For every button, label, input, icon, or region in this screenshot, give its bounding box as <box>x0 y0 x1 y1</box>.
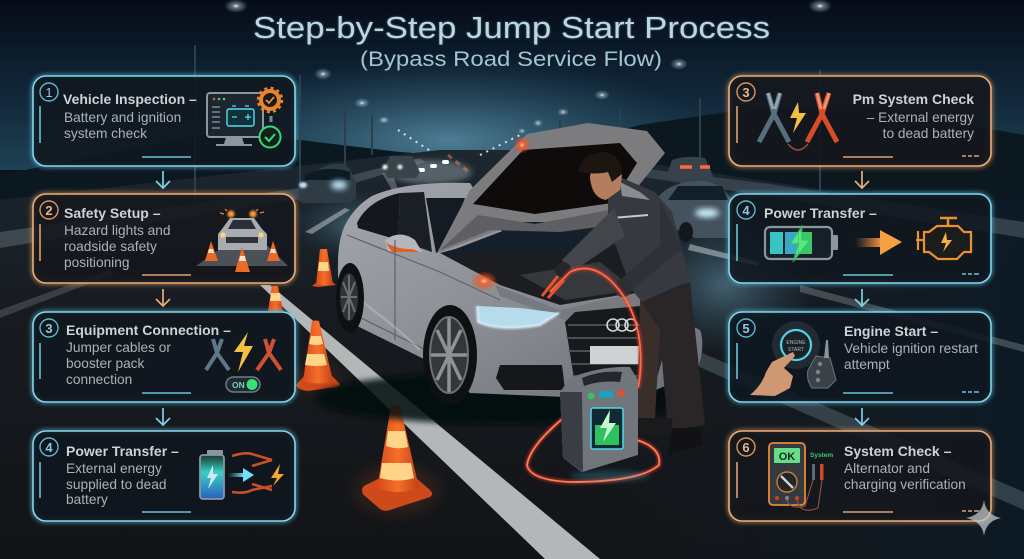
panel 4: Power Transfer: battery <box>66 492 108 507</box>
cone: small behind panel <box>268 286 283 311</box>
cone: large <box>355 405 439 514</box>
headlight <box>477 306 559 328</box>
icon: car with hazard lights and cones <box>196 209 288 272</box>
icon: start button, hand and key fob: START <box>788 347 804 353</box>
shadow <box>315 372 695 424</box>
panel 2: Safety Setup: 2 <box>45 203 53 218</box>
panel 1: Vehicle Inspection: system check <box>64 126 147 141</box>
grille <box>565 306 642 390</box>
panel 4: Power Transfer <box>33 431 295 521</box>
arrow: step 1 to 2 <box>156 171 170 188</box>
cone: small far <box>312 249 336 287</box>
rear wheel <box>336 263 364 333</box>
panel 2: Safety Setup: roadside safety <box>64 239 157 254</box>
panel 6: right Power Transfer: Power Transfer – <box>764 205 877 221</box>
panel 4: Power Transfer: supplied to dead <box>66 477 166 492</box>
panel 3: Equipment Connection: connection <box>66 372 132 387</box>
title <box>253 10 770 71</box>
panel 5: right Pm System Check: to dead battery <box>883 126 974 141</box>
panel 4: Power Transfer: 4 <box>45 440 53 455</box>
icon: clamps bolt and on switch <box>206 332 281 392</box>
arrow: right step 4 to 5 <box>855 289 869 306</box>
panel 1: Vehicle Inspection <box>33 76 295 166</box>
icon: battery to engine <box>765 218 971 262</box>
icon: start button, hand and key fob <box>750 321 836 396</box>
arrow: right step 5 to 6 <box>855 408 869 425</box>
icon: multimeter: OK <box>779 451 795 463</box>
panel 7: Engine Start: Engine Start – <box>844 323 938 339</box>
title: Step-by-Step Jump Start Process <box>253 10 770 45</box>
panel 2: Safety Setup: Safety Setup – <box>64 205 161 221</box>
icon: start button, hand and key fob: ENGINE <box>786 340 806 346</box>
panel 5: right Pm System Check: Pm System Check <box>853 91 974 107</box>
open hood <box>437 123 665 253</box>
arms <box>562 208 625 272</box>
arrow: step 3 to 4 <box>156 408 170 425</box>
car body <box>338 183 702 397</box>
icon: monitor battery gear check <box>207 88 282 148</box>
panel 7: Engine Start <box>729 312 991 402</box>
booster pack <box>560 367 650 481</box>
panel 1: Vehicle Inspection: Battery and ignition <box>64 110 181 125</box>
air intake <box>496 365 565 390</box>
panel 8: System Check <box>729 431 991 521</box>
side windows <box>357 193 400 240</box>
cone: medium <box>291 320 343 392</box>
sedan with open hood <box>315 123 702 424</box>
icon: clamps bolt and on switch: ON <box>232 380 245 390</box>
panel 3: Equipment Connection: 3 <box>45 321 53 336</box>
torso <box>608 178 690 302</box>
licence plate <box>590 346 640 364</box>
jumper cable <box>527 268 659 482</box>
distant cars <box>298 156 732 242</box>
gloves <box>555 262 571 278</box>
panel 7: Engine Start: 5 <box>742 321 750 336</box>
panel 5: right Pm System Check: 3 <box>742 85 750 100</box>
panel 6: right Power Transfer <box>729 194 991 283</box>
panel 3: Equipment Connection: Jumper cables or <box>66 340 171 355</box>
panel 2: Safety Setup: Hazard lights and <box>64 223 171 238</box>
panel 6: right Power Transfer: 4 <box>742 203 750 218</box>
front wheel <box>423 305 477 405</box>
boots <box>637 418 673 436</box>
hair <box>578 152 622 182</box>
panel 1: Vehicle Inspection: 1 <box>45 85 53 100</box>
icon: battery charge with clamps <box>200 450 284 499</box>
icon: multimeter: System <box>810 452 833 459</box>
panel 8: System Check: Alternator and <box>844 461 930 476</box>
panel 4: Power Transfer: External energy <box>66 461 162 476</box>
panel 2: Safety Setup <box>33 194 295 283</box>
door lines <box>345 235 500 352</box>
panel 2: Safety Setup: positioning <box>64 255 129 270</box>
neck and face <box>590 160 622 200</box>
panel 8: System Check: charging verification <box>844 477 966 492</box>
panel 3: Equipment Connection <box>33 312 295 402</box>
panel 4: Power Transfer: Power Transfer – <box>66 443 179 459</box>
icon: sparkle watermark <box>966 500 1001 536</box>
panel 7: Engine Start: attempt <box>844 357 890 372</box>
legs <box>640 282 705 430</box>
technician <box>555 152 705 455</box>
panel 5: right Pm System Check <box>729 76 991 166</box>
panel 8: System Check: System Check – <box>844 443 952 459</box>
traffic cones <box>268 249 439 514</box>
mirror <box>385 234 422 252</box>
panel 3: Equipment Connection: booster pack <box>66 356 145 371</box>
panel 5: right Pm System Check: – External energy <box>867 110 974 125</box>
arrow: right step 3 to 4 <box>855 171 869 188</box>
engine bay <box>440 240 650 305</box>
panel 1: Vehicle Inspection: Vehicle Inspection – <box>63 91 197 107</box>
icon: jumper clamps <box>759 93 837 150</box>
title: (Bypass Road Service Flow) <box>360 48 662 71</box>
audi rings <box>607 319 637 331</box>
panel 7: Engine Start: Vehicle ignition restart <box>844 341 978 356</box>
windshield lower <box>445 232 630 253</box>
panel 8: System Check: 6 <box>742 440 750 455</box>
arrow: step 2 to 3 <box>156 289 170 306</box>
icon: multimeter <box>769 443 833 510</box>
panel 3: Equipment Connection: Equipment Connection – <box>66 322 231 338</box>
title: Step-by-Step Jump Start Process <box>253 10 770 45</box>
